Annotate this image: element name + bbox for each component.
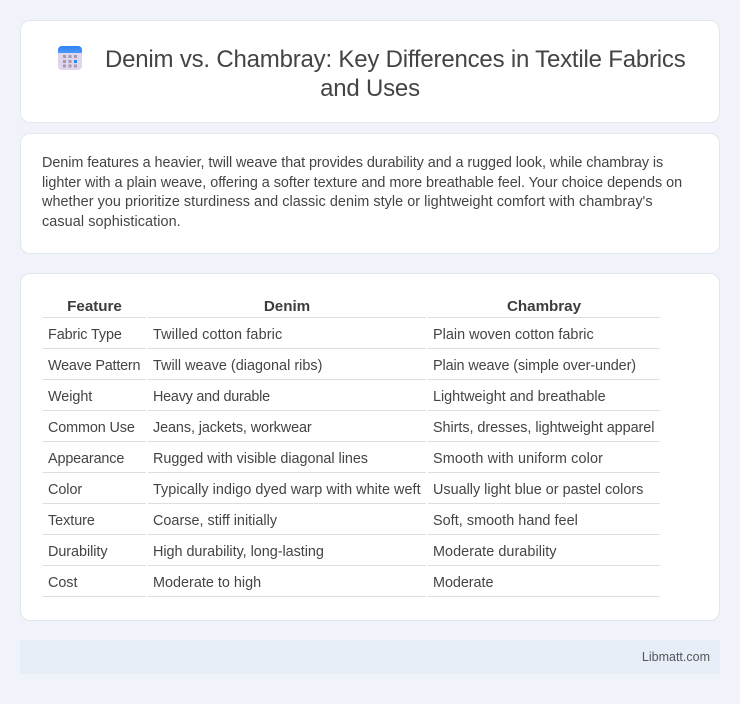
row: Cost: Moderate to high — [153, 575, 261, 591]
table header row — [43, 298, 660, 318]
row: Texture: Texture — [48, 513, 95, 529]
row: Weight: Heavy and durable — [153, 389, 270, 405]
panel: comparison table — [20, 273, 720, 621]
table header row: Feature — [67, 298, 122, 315]
row: Durability: High durability, long-lasting — [153, 544, 324, 560]
row: Fabric Type — [43, 327, 660, 349]
icon: calendar — [58, 46, 82, 70]
row: Cost: Cost — [48, 575, 77, 591]
row: Color — [43, 482, 660, 504]
panel: title card — [20, 20, 720, 123]
row: Fabric Type: Twilled cotton fabric — [153, 327, 282, 343]
title: Denim vs. Chambray: Key Differences in Textile Fabrics — [105, 46, 686, 73]
row: Weave Pattern: Plain weave (simple over-under) — [433, 358, 636, 374]
row: Weave Pattern: Weave Pattern — [48, 358, 140, 374]
row: Color: Typically indigo dyed warp with white weft — [153, 482, 421, 498]
row: Weight: Lightweight and breathable — [433, 389, 606, 405]
row: Appearance: Smooth with uniform color — [433, 451, 603, 467]
row: Weave Pattern — [43, 358, 660, 380]
row: Durability — [43, 544, 660, 566]
row: Common Use: Common Use — [48, 420, 135, 436]
row: Appearance: Rugged with visible diagonal lines — [153, 451, 368, 467]
panel: description — [20, 133, 720, 254]
title: and Uses — [320, 75, 420, 102]
row: Durability: Durability — [48, 544, 107, 560]
footer bar — [20, 640, 720, 674]
row: Weave Pattern: Twill weave (diagonal ribs) — [153, 358, 322, 374]
row: Color: Usually light blue or pastel colors — [433, 482, 643, 498]
table header row: Denim — [264, 298, 310, 315]
row: Texture: Coarse, stiff initially — [153, 513, 277, 529]
text block: description: lighter with a plain weave, offering a softer texture and more breathable feel. Your choice depends on — [42, 175, 682, 191]
row: Color: Color — [48, 482, 82, 498]
text block: description: Denim features a heavier, twill weave that provides durability and a rugged look, while chambray is — [42, 155, 663, 171]
row: Texture: Soft, smooth hand feel — [433, 513, 578, 529]
text block: description: whether you prioritize sturdiness and classic denim style or lightweight comfort with chambray's — [42, 194, 653, 210]
row: Weight — [43, 389, 660, 411]
row: Appearance — [43, 451, 660, 473]
row: Weight: Weight — [48, 389, 92, 405]
row: Cost — [43, 575, 660, 597]
row: Cost: Moderate — [433, 575, 493, 591]
text block: description — [42, 155, 682, 230]
text block: description: casual sophistication. — [42, 214, 181, 230]
row: Common Use — [43, 420, 660, 442]
title — [105, 46, 686, 102]
row: Durability: Moderate durability — [433, 544, 557, 560]
row: Fabric Type: Fabric Type — [48, 327, 122, 343]
table header row: Chambray — [507, 298, 581, 315]
row: Texture — [43, 513, 660, 535]
row: Common Use: Shirts, dresses, lightweight apparel — [433, 420, 654, 436]
row: Appearance: Appearance — [48, 451, 124, 467]
footer text: Libmatt.com — [642, 650, 710, 664]
row: Common Use: Jeans, jackets, workwear — [153, 420, 312, 436]
row: Fabric Type: Plain woven cotton fabric — [433, 327, 594, 343]
